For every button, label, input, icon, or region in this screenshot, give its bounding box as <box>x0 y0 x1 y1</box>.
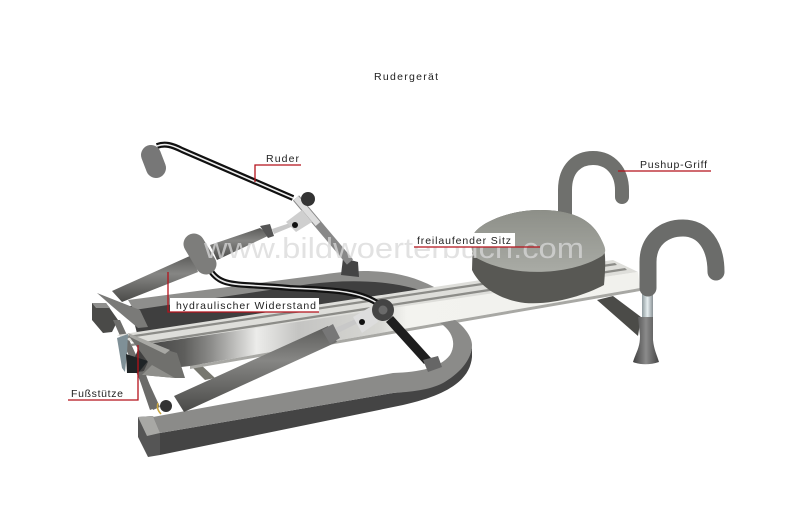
label: Pushup-Griff: Pushup-Griff <box>640 159 707 171</box>
title: Rudergerät <box>374 71 438 83</box>
rear seat support beam <box>597 296 641 336</box>
rear frame rail <box>92 271 436 345</box>
label: Ruder <box>255 153 301 182</box>
rear oar: chrome tube, handle, lever <box>151 145 359 277</box>
rear foot plate <box>97 293 148 328</box>
label: hydraulischer Widerstand: hydraulischer Widerstand <box>176 300 316 312</box>
seat <box>471 210 605 303</box>
label: hydraulischer Widerstand <box>168 272 319 312</box>
lever pivot foot <box>423 356 442 372</box>
lower rear lever <box>386 316 431 364</box>
label: Ruder: Ruder <box>266 153 300 165</box>
foot support cross bars <box>113 320 160 410</box>
upper hydraulic cylinder <box>112 223 291 302</box>
rail beam <box>117 260 640 373</box>
front pushup grip, post and foot <box>633 228 716 364</box>
front clevis and knob <box>353 299 394 333</box>
label: freilaufender Sitz: freilaufender Sitz <box>417 235 511 247</box>
rowing machine illustration <box>92 145 716 457</box>
label: freilaufender Sitz <box>414 233 540 247</box>
front frame rail <box>138 320 472 457</box>
watermark: www.bildwoerterbuch.com <box>203 233 584 265</box>
lower hydraulic cylinder <box>157 318 360 414</box>
rear pushup grip <box>565 158 622 216</box>
label: Fußstütze: Fußstütze <box>71 388 123 400</box>
front foot plate <box>128 333 185 410</box>
label: Fußstütze <box>68 345 138 400</box>
front oar: chrome tube and handle <box>194 244 380 305</box>
